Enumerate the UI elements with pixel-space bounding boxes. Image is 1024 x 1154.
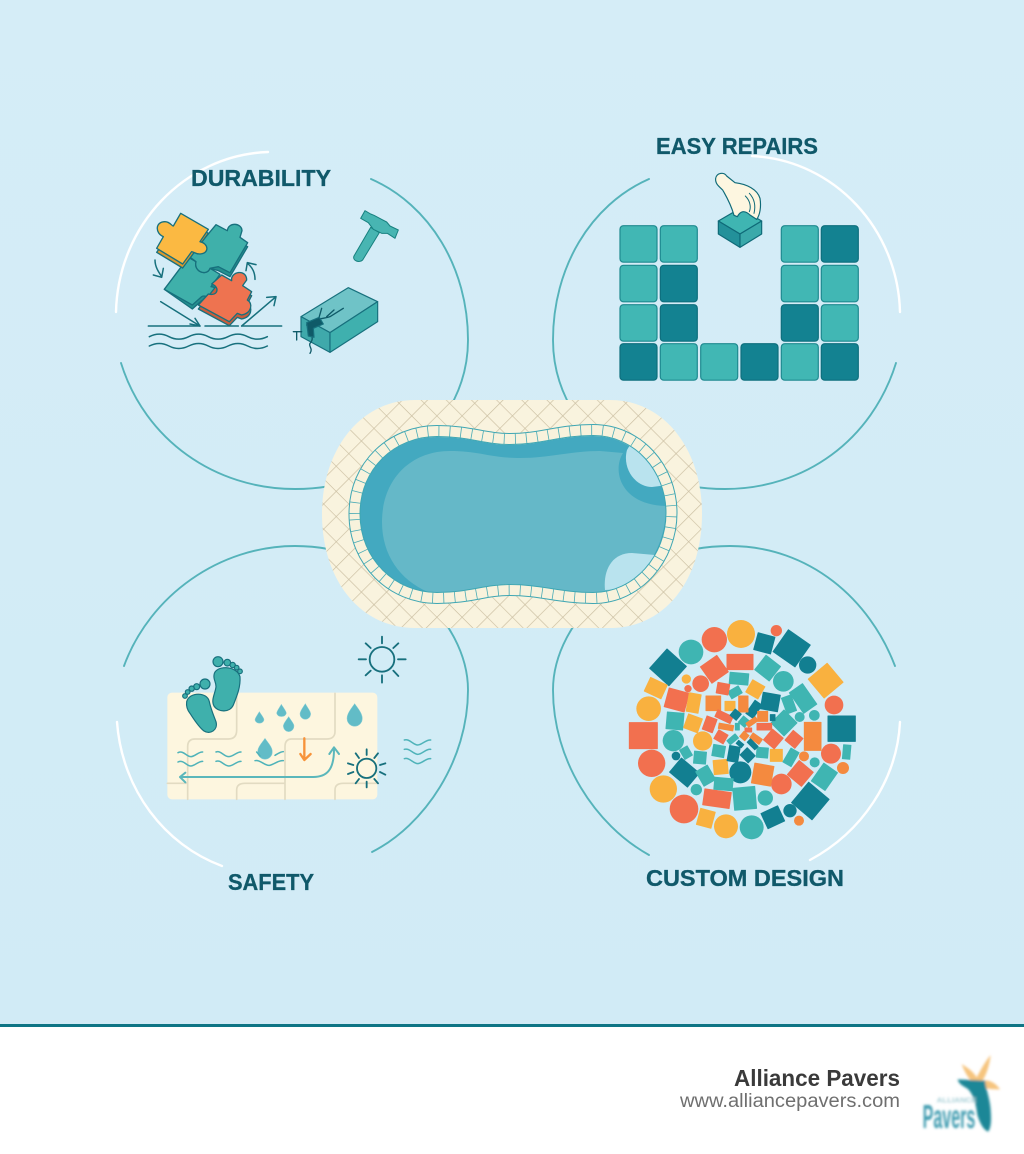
- heading: easy repairs: EASY REPAIRS: [656, 133, 818, 159]
- arc: safety: [117, 546, 468, 866]
- water shallow floor: [382, 451, 666, 593]
- motion arrows: [148, 260, 282, 326]
- paver tiles grid: [620, 226, 858, 380]
- puzzle pieces: [157, 213, 252, 326]
- brand name: Alliance Pavers: [734, 1065, 900, 1091]
- icon: sun small: [348, 749, 385, 787]
- orange down arrow: [300, 738, 311, 760]
- coping tile band: [354, 430, 672, 598]
- heading: custom design: CUSTOM DESIGN: [646, 865, 844, 891]
- Florida shape: [958, 1079, 991, 1132]
- footer rule: [0, 1024, 1024, 1027]
- water drops: [255, 704, 362, 759]
- logo wordmark small: ALLIANCE: [937, 1096, 977, 1105]
- circle arcs: [116, 152, 900, 866]
- centerpiece: pool with paver deck: [322, 400, 702, 628]
- water deep edge: [360, 436, 666, 593]
- icon: hand lifting tile: [716, 173, 762, 247]
- heading: durability: DURABILITY: [191, 165, 331, 191]
- waves: [149, 334, 267, 348]
- palm fronds: [962, 1055, 1000, 1089]
- icon: cracked paver brick: [293, 288, 378, 353]
- wave marks: [178, 740, 431, 766]
- icon: bare feet: [183, 657, 242, 732]
- mosaic circles: [636, 620, 849, 839]
- illustration: custom design mosaic: [629, 620, 855, 839]
- illustration: durability: [148, 211, 398, 353]
- arc: custom design: [553, 546, 900, 860]
- illustration: safety: [167, 637, 431, 799]
- website: www.alliancepavers.com: [679, 1091, 900, 1112]
- icon: sun large: [359, 637, 406, 683]
- heading: safety: SAFETY: [228, 869, 314, 895]
- icon: hammer: [354, 211, 398, 261]
- arc: easy repairs: [553, 156, 900, 489]
- textured safety mat: [167, 693, 377, 799]
- illustration: easy repairs: [620, 173, 858, 380]
- logo: [923, 1055, 1000, 1136]
- mosaic squares: [629, 630, 855, 829]
- footer background: [0, 1027, 1024, 1154]
- step bottom right: [605, 553, 655, 590]
- arc: durability: [116, 152, 468, 489]
- teal flow arrow: [180, 747, 339, 782]
- step top right: [626, 445, 668, 487]
- paver deck: [322, 400, 702, 628]
- footer band: [0, 1024, 1024, 1154]
